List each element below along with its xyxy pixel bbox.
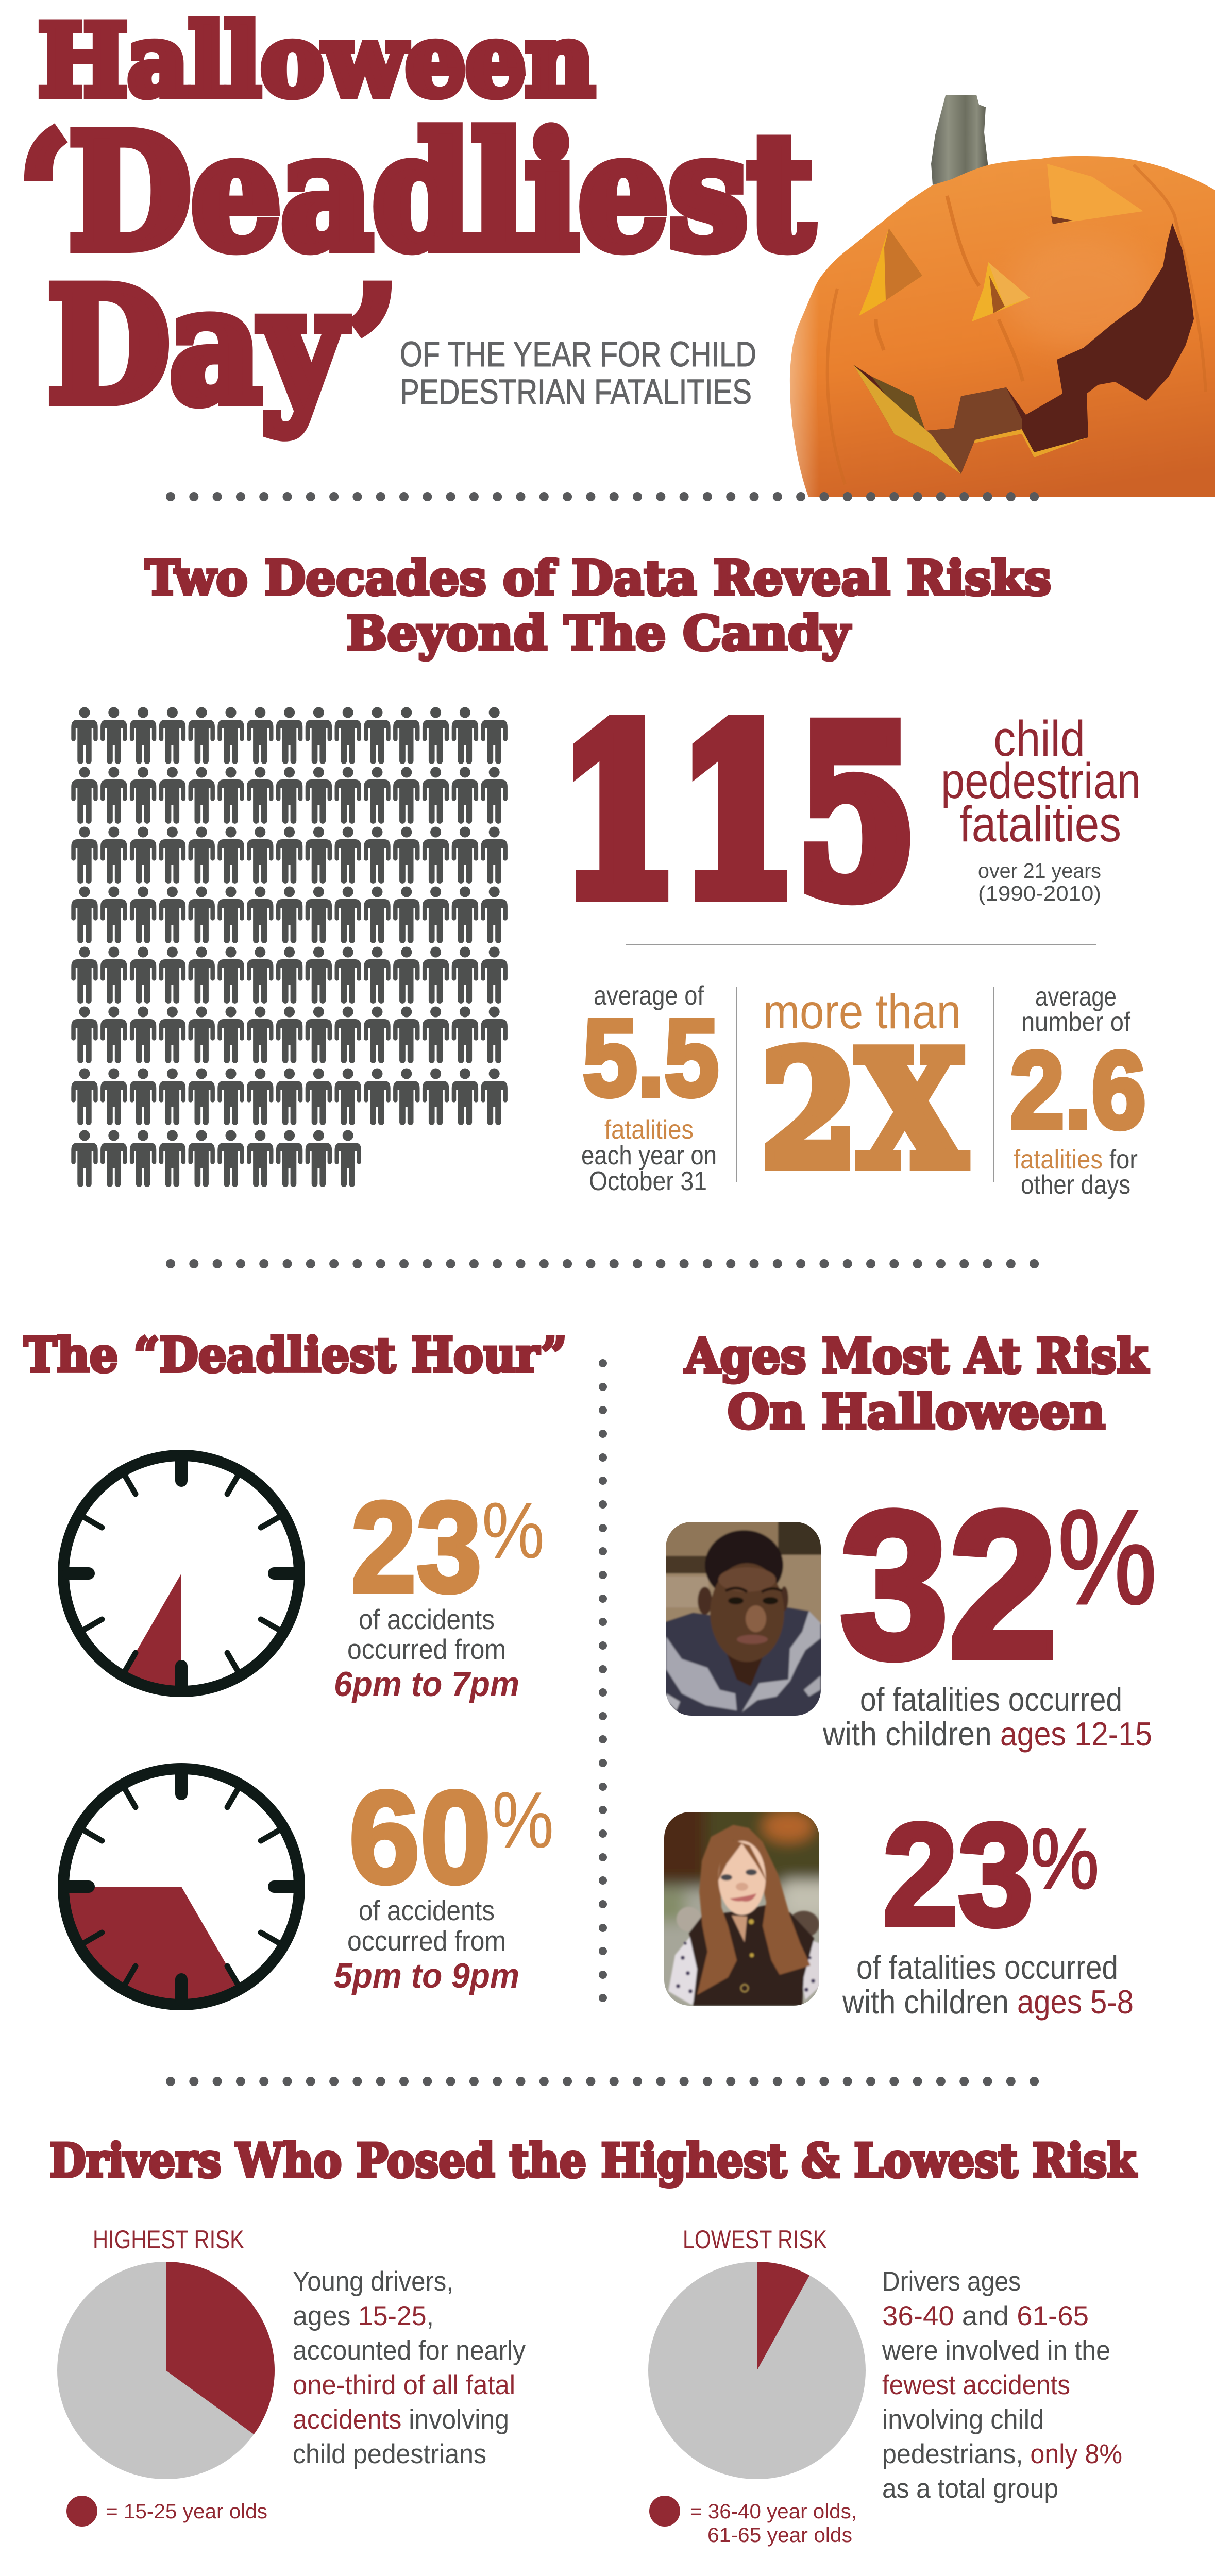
heading: two decades of data: Beyond The Candy (346, 605, 851, 661)
text: drivers ages 36-40 and 61-65: as a total group (882, 2473, 1058, 2504)
stat: average of 5.5: each year on (581, 1141, 717, 1171)
stat: 60 percent: 60 (349, 1764, 491, 1911)
stat: 23 percent: of accidents (359, 1603, 495, 1635)
text: young drivers: accidents involving (293, 2404, 509, 2435)
icon: carved jack-o-lantern pumpkin (790, 95, 1215, 500)
stat: average of 5.5 (581, 981, 719, 1196)
stat: 23 percent ages 5-8: of fatalities occurred (856, 1948, 1118, 1986)
text: drivers ages 36-40 and 61-65: 36-40 and 61-65 (882, 2301, 1089, 2331)
legend: 36-40 and 61-65 year olds: = 36-40 year olds, (690, 2500, 857, 2523)
stat: 23 percent ages 5-8: 23 (883, 1793, 1033, 1956)
label: child pedestrian fatalities: fatalities (959, 796, 1121, 852)
stat: average number of 2.6 (1010, 982, 1146, 1200)
stat: average number of 2.6: 2.6 (1010, 1029, 1146, 1151)
heading: deadliest hour: The “Deadliest Hour” (24, 1327, 567, 1383)
stat: 32 percent: with children ages 12-15 (822, 1715, 1152, 1753)
legend: 15-25 year olds: = 15-25 year olds (106, 2500, 267, 2523)
label: lowest risk: LOWEST RISK (683, 2225, 827, 2254)
title: Halloween 'Deadliest Day' (20, 3, 814, 438)
stat: average number of 2.6: fatalities for (1014, 1145, 1138, 1175)
stat: 60 percent: of accidents (359, 1894, 495, 1926)
stat: 23 percent: 23 (351, 1475, 482, 1619)
divider: dotted line under header (166, 492, 1039, 501)
panel: ages most at risk (644, 1328, 1157, 2022)
stat: 23 percent: occurred from (347, 1633, 506, 1665)
label: child pedestrian fatalities: (1990-2010) (978, 882, 1101, 905)
text: young drivers: Young drivers, (293, 2266, 453, 2297)
stat: 23 percent ages 5-8: % (1031, 1811, 1099, 1907)
chart: pie highest risk (57, 2262, 275, 2479)
text: drivers ages 36-40 and 61-65: involving child (882, 2404, 1044, 2435)
text: drivers ages 36-40 and 61-65: were involved in the (882, 2335, 1110, 2366)
text: drivers ages 36-40 and 61-65: Drivers ages (882, 2266, 1021, 2297)
heading: two decades of data: Two Decades of Data Reveal Risks (145, 550, 1051, 606)
stat: average of 5.5: average of (594, 981, 704, 1011)
stat: 32 percent (822, 1468, 1157, 1753)
stat: more than 2X: 2X (761, 1018, 966, 1203)
text: young drivers: ages 15-25, (293, 2301, 434, 2331)
photo: young girl (664, 1812, 819, 2006)
stat: 60 percent: % (492, 1775, 554, 1865)
stat: 32 percent: of fatalities occurred (860, 1681, 1122, 1718)
legend: 15-25 year olds (66, 2496, 267, 2527)
heading: ages most at risk: On Halloween (728, 1384, 1105, 1439)
text: young drivers: one-third of all fatal (293, 2370, 515, 2400)
heading: ages most at risk: Ages Most At Risk (684, 1328, 1149, 1384)
stat: 60 percent: occurred from (347, 1925, 506, 1957)
label: child pedestrian fatalities: child (993, 710, 1085, 767)
stat: average number of 2.6: average (1035, 982, 1117, 1012)
text: drivers ages 36-40 and 61-65 (882, 2266, 1122, 2504)
text: young drivers (293, 2266, 526, 2469)
text: young drivers: child pedestrians (293, 2439, 486, 2469)
chart: clock 5pm to 9pm (63, 1769, 299, 2005)
stat: 23 percent ages 5-8: with children ages 5-8 (842, 1983, 1134, 2021)
legend: 36-40 and 61-65 year olds: 61-65 year olds (707, 2524, 852, 2547)
subtitle (400, 334, 756, 412)
big stat: 115: 115 (560, 680, 916, 947)
divider: dotted line (166, 2077, 1039, 2086)
chart: clock 6pm to 7pm (63, 1455, 299, 1691)
stat: average number of 2.6: other days (1021, 1170, 1130, 1200)
title: Halloween 'Deadliest Day': ‘Deadliest (20, 100, 814, 284)
text: drivers ages 36-40 and 61-65: pedestrians, only 8% (882, 2439, 1122, 2469)
stat: average of 5.5: fatalities (604, 1115, 694, 1145)
stat: 23 percent ages 5-8 (842, 1793, 1134, 2021)
photo: teenage boy (662, 1519, 824, 1721)
label: child pedestrian fatalities (941, 710, 1141, 905)
heading: ages most at risk (684, 1328, 1149, 1439)
stat: 23 percent (334, 1475, 545, 1704)
pictogram: 115 people (71, 707, 508, 1187)
panel: drivers risk (49, 2133, 1137, 2547)
panel: the deadliest hour (24, 1327, 567, 2005)
stat: average of 5.5: October 31 (589, 1166, 707, 1196)
label: child pedestrian fatalities: over 21 years (978, 859, 1101, 883)
subtitle: PEDESTRIAN FATALITIES (400, 372, 752, 412)
divider: dotted line (166, 1259, 1039, 1268)
legend: 36-40 and 61-65 year olds (649, 2496, 857, 2547)
stat: 32 percent: 32 (840, 1468, 1057, 1701)
stat: 60 percent: 5pm to 9pm (334, 1956, 519, 1995)
title: Halloween 'Deadliest Day': Halloween (38, 3, 595, 118)
text: drivers ages 36-40 and 61-65: fewest accidents (882, 2370, 1070, 2400)
chart: pie lowest risk (648, 2262, 866, 2479)
title: Halloween 'Deadliest Day': Day’ (47, 253, 398, 438)
stat: 23 percent: 6pm to 7pm (334, 1665, 519, 1704)
stat: 23 percent: % (482, 1486, 545, 1575)
stat: average number of 2.6: number of (1021, 1007, 1130, 1037)
stat: more than 2X: more than (763, 985, 961, 1039)
text: young drivers: accounted for nearly (293, 2335, 526, 2366)
label: child pedestrian fatalities: pedestrian (941, 753, 1141, 809)
heading: two decades of data (145, 550, 1051, 661)
label: highest risk: HIGHEST RISK (93, 2225, 244, 2254)
heading: drivers who posed risk: Drivers Who Posed the Highest & Lowest Risk (49, 2133, 1137, 2188)
stat: 60 percent (334, 1764, 554, 1995)
subtitle: OF THE YEAR FOR CHILD (400, 334, 756, 374)
stat: 32 percent: % (1058, 1483, 1157, 1632)
stat: average of 5.5: 5.5 (583, 996, 719, 1118)
